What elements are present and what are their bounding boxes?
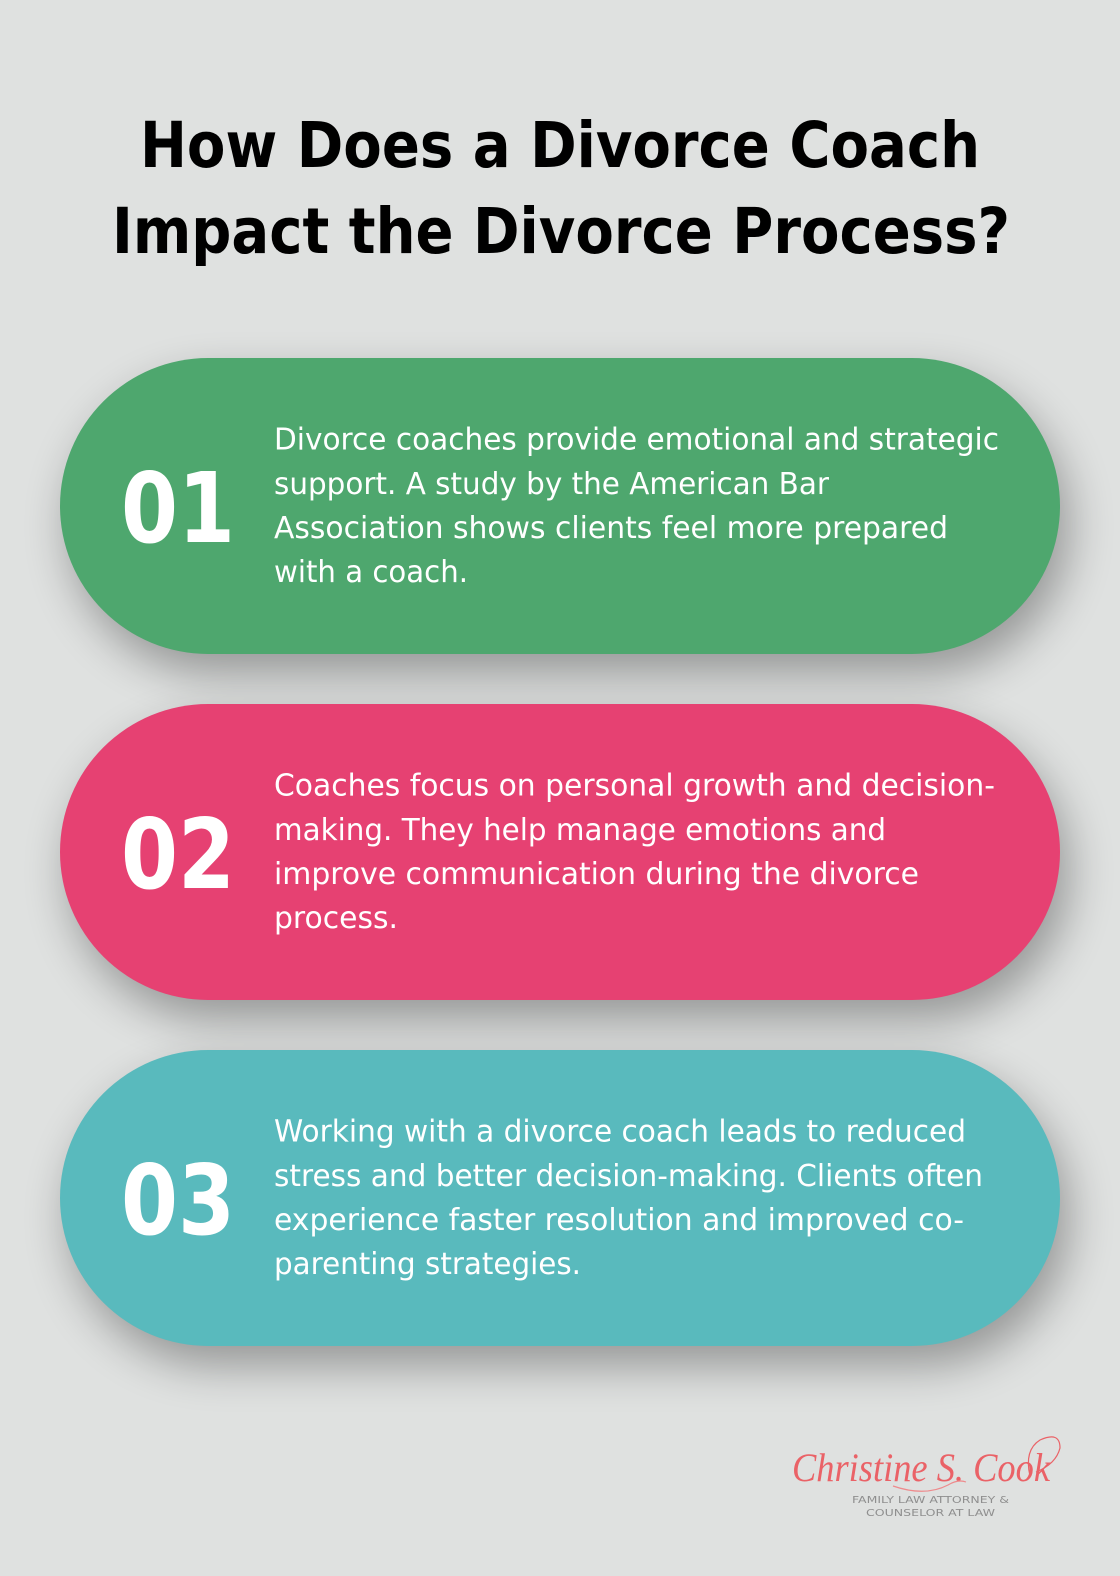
step 02 text: process. — [274, 901, 398, 936]
logo: Christine S. Cook: COUNSELOR AT LAW — [866, 1508, 995, 1519]
step 02 text: making. They help manage emotions and — [274, 813, 886, 848]
title — [112, 109, 1010, 268]
step 02 text — [274, 769, 995, 936]
step 02 text: improve communication during the divorce — [274, 857, 919, 892]
logo: Christine S. Cook: FAMILY LAW ATTORNEY & — [852, 1495, 1009, 1506]
panel: step 01 — [60, 358, 1060, 654]
step 01 text: support. A study by the American Bar — [274, 467, 829, 502]
step number 02: 02 — [121, 798, 235, 911]
step number 01: 01 — [121, 452, 235, 565]
logo: Christine S. Cook: Christine S. Cook — [792, 1445, 1051, 1490]
step 01 text: with a coach. — [274, 555, 468, 590]
step 01 text — [274, 423, 999, 590]
step 03 text: stress and better decision-making. Clients often — [274, 1159, 983, 1194]
step number 03: 03 — [121, 1144, 235, 1257]
logo: Christine S. Cook — [792, 1436, 1061, 1519]
step 03 text: parenting strategies. — [274, 1247, 581, 1282]
title: Impact the Divorce Process? — [112, 195, 1010, 268]
panel: step 02 — [60, 704, 1060, 1000]
step 02 text: Coaches focus on personal growth and decision- — [274, 769, 995, 804]
step 03 text: experience faster resolution and improved co- — [274, 1203, 964, 1238]
step 01 text: Divorce coaches provide emotional and strategic — [274, 423, 999, 458]
panel: step 03 — [60, 1050, 1060, 1346]
step 01 text: Association shows clients feel more prepared — [274, 511, 948, 546]
step 03 text: Working with a divorce coach leads to reduced — [274, 1115, 966, 1150]
step 03 text — [274, 1115, 983, 1282]
title: How Does a Divorce Coach — [140, 109, 980, 182]
